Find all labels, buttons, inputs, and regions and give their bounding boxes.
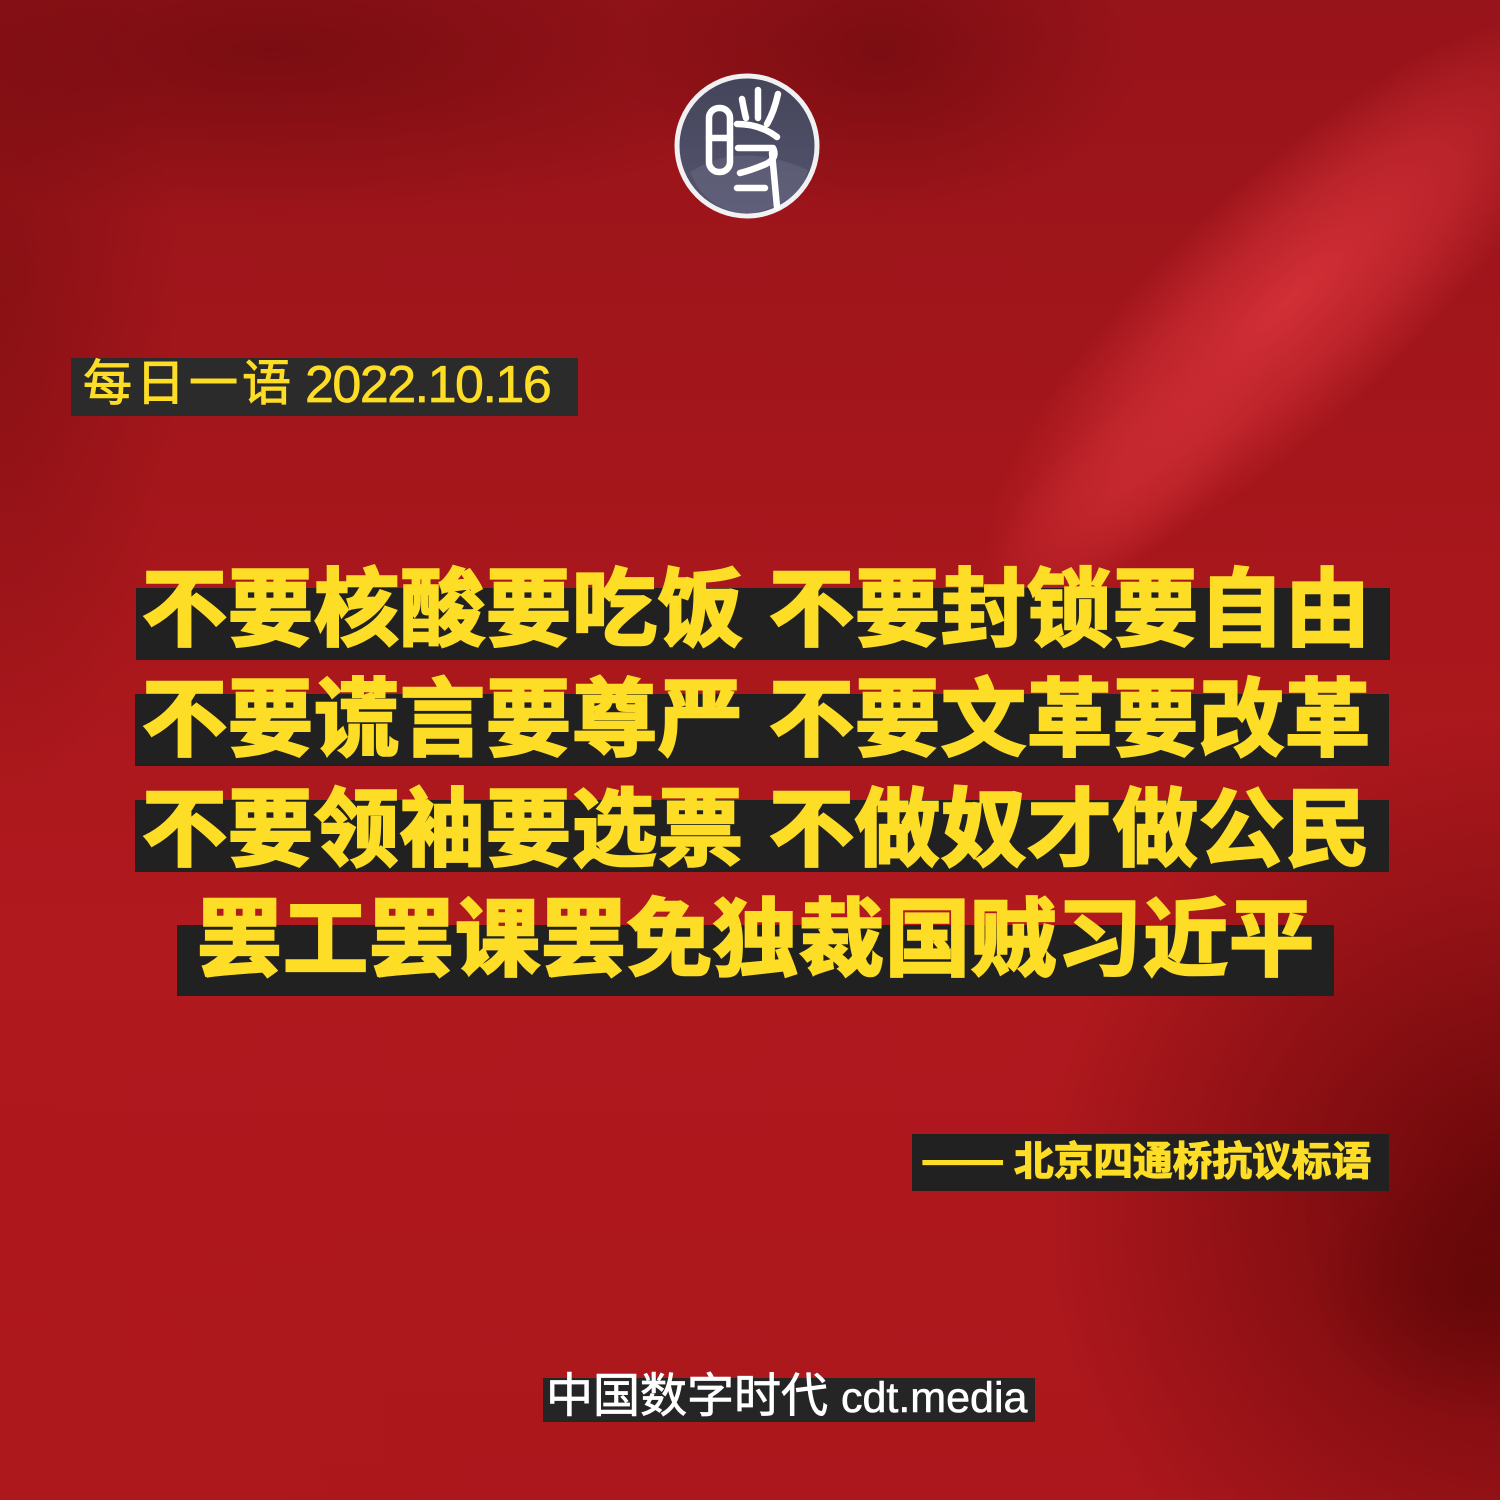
slogan line 1 — [136, 563, 1390, 660]
source attribution — [912, 1134, 1389, 1191]
slogan line 3: 不要领袖要选票 — [142, 783, 744, 878]
footer brand: cdt.media — [841, 1374, 1027, 1422]
slogan line 2: 不要文革要改革 — [769, 673, 1371, 768]
slogan line 2: 不要谎言要尊严 — [142, 673, 744, 768]
slogan line 4: 罢工罢课罢免独裁国贼习近平 — [197, 893, 1315, 988]
date tag — [71, 356, 578, 416]
footer brand — [543, 1369, 1035, 1422]
footer brand: 中国数字时代 — [546, 1369, 828, 1422]
date tag: 每日一语 — [83, 357, 295, 411]
date tag: 2022.10.16 — [305, 356, 550, 414]
source attribution: 北京四通桥抗议标语 — [1014, 1140, 1371, 1184]
logo: seal emblem — [674, 74, 820, 218]
slogan line 3: 不做奴才做公民 — [769, 783, 1371, 878]
slogan line 3 — [135, 783, 1389, 878]
slogan line 2 — [135, 673, 1389, 768]
source attribution: —— — [923, 1138, 1002, 1182]
slogan line 1: 不要封锁要自由 — [769, 563, 1371, 658]
slogan line 1: 不要核酸要吃饭 — [142, 563, 744, 658]
